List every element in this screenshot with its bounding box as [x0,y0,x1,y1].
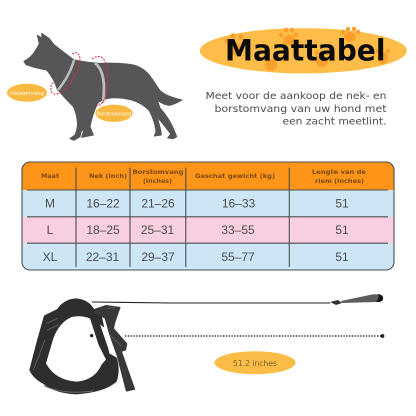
title: Maattabel [225,34,386,68]
table rows: 29–37 [141,250,175,264]
length label [214,351,296,374]
intro text [206,91,387,128]
dimension line [125,334,384,338]
neck measuring loop [51,53,80,94]
table rows: 21–26 [141,196,175,210]
table header: Maat [41,172,59,180]
table header: Lengte van de [312,168,367,176]
table header: Borstomvang [132,168,184,176]
table header: riem (inches) [315,177,364,185]
table rows: 18–25 [86,223,120,237]
illustration: harness [29,298,135,394]
table header [41,168,367,185]
table rows: 51 [335,223,349,237]
table rows: 16–22 [86,196,120,210]
table rows: 51 [335,196,349,210]
length label: 51.2 inches [233,358,277,368]
intro text: Meet voor de aankoop de nek- en [206,91,386,102]
label: Halsomvang [7,84,47,102]
illustration: dog with measuring points [7,33,182,140]
chest strap [95,63,104,103]
label: Halsomvang: Halsomvang [10,91,44,97]
neck strap [58,60,74,90]
table rows: 55–77 [221,250,255,264]
title badge [200,27,407,73]
table rows: 25–31 [141,223,175,237]
intro text: een zacht meetlint. [282,116,386,128]
table rows: M [45,196,55,210]
chest measuring loop [92,56,108,106]
size table [22,162,394,270]
table rows: 16–33 [222,196,256,210]
label: Borstomvang [95,105,133,122]
table header: Nek (inch) [89,172,127,180]
leash clip [330,300,342,305]
table rows [43,196,349,264]
leash handle loop [341,294,383,303]
table header: Geschat gewicht (kg) [195,172,275,180]
harness strap gap [100,324,114,354]
harness body loop [29,298,119,394]
table rows: 33–55 [221,223,255,237]
table rows: L [47,223,54,237]
harness chest strap [94,305,135,392]
table rows: XL [43,250,58,264]
icon: dog silhouette [24,33,182,140]
icon: paw prints [224,27,390,71]
harness highlights [33,308,122,370]
label: Borstomvang: Borstomvang [96,112,132,118]
table rows: 51 [335,250,349,264]
table rows: 22–31 [86,250,120,264]
intro text: borstomvang van uw hond met [214,104,387,115]
table header: (inches) [143,177,172,185]
leash [92,294,383,305]
